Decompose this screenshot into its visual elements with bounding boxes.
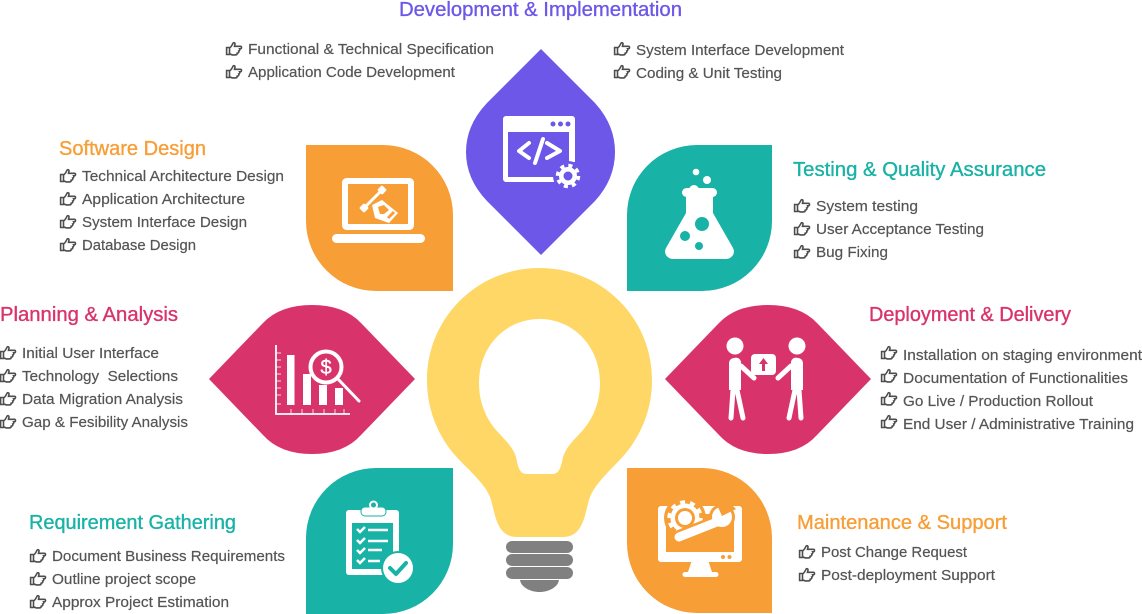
panel: requirement gathering: [29, 468, 453, 614]
shape: purple drop: [466, 49, 615, 255]
list: requirement: Document Business Requirements: [52, 548, 285, 565]
panel: planning and analysis: [0, 304, 415, 454]
panel: testing and quality assurance: [627, 145, 1046, 291]
list: development left: Functional & Technical Specification: [248, 41, 494, 58]
list: maintenance: Post-deployment Support: [821, 567, 996, 584]
list: deployment: Documentation of Functionalities: [903, 370, 1128, 387]
panel: development and implementation: [227, 0, 845, 255]
icon: bar chart with magnifier: [276, 345, 359, 414]
list: deployment: Go Live / Production Rollout: [903, 393, 1094, 410]
icon: code window with gear: [503, 116, 583, 191]
heading: software design: Software Design: [59, 138, 206, 160]
list: development right: System Interface Development: [636, 42, 845, 59]
list: software design: Technical Architecture Design: [82, 168, 284, 185]
list: software design: Application Architecture: [82, 191, 245, 208]
list: testing: Bug Fixing: [816, 244, 888, 261]
list: maintenance: Post Change Request: [821, 544, 968, 561]
list: software design: System Interface Design: [82, 214, 247, 231]
heading: requirement: Requirement Gathering: [29, 512, 236, 534]
icon: clipboard checklist: [346, 502, 415, 585]
list: deployment: [882, 347, 1142, 433]
list: deployment: End User / Administrative Training: [903, 416, 1134, 433]
shape: orange leaf: [627, 468, 772, 613]
list: requirement: Outline project scope: [52, 571, 196, 588]
panel: software design: [59, 138, 453, 291]
list: deployment: Installation on staging environment: [903, 347, 1142, 364]
list: planning: Initial User Interface: [22, 345, 159, 362]
list: software design: [61, 168, 284, 254]
heading: planning: Planning & Analysis: [0, 304, 178, 326]
light bulb: [427, 268, 652, 592]
icon: monitor with gear and wrench: [658, 497, 742, 577]
list: planning: Data Migration Analysis: [22, 391, 183, 408]
icon: laptop with pen tool: [332, 181, 425, 243]
list: development right: Coding & Unit Testing: [636, 65, 782, 82]
panel: deployment and delivery: [665, 304, 1142, 454]
shape: pink diamond left: [209, 305, 415, 454]
list: testing: System testing: [816, 198, 918, 215]
list: planning: Gap & Fesibility Analysis: [22, 414, 188, 431]
icon: two people exchanging a box: [726, 338, 806, 418]
list: requirement: Approx Project Estimation: [52, 594, 229, 611]
list: planning: [1, 345, 188, 431]
list: requirement: [31, 548, 285, 611]
bulb base: [506, 541, 573, 592]
heading: deployment: Deployment & Delivery: [869, 304, 1071, 326]
list: testing: User Acceptance Testing: [816, 221, 984, 238]
list: testing: [795, 198, 984, 261]
shape: teal leaf: [627, 145, 772, 291]
icon: flask: [665, 169, 734, 259]
shape: teal leaf: [306, 468, 453, 614]
icon: bar chart with magnifier: $: [320, 357, 332, 379]
list: development right: [615, 42, 845, 82]
heading: maintenance: Maintenance & Support: [797, 512, 1007, 534]
panel: maintenance and support: [627, 468, 1007, 613]
list: software design: Database Design: [82, 237, 196, 254]
heading: testing: Testing & Quality Assurance: [793, 159, 1046, 181]
list: development left: [227, 41, 494, 81]
list: development left: Application Code Development: [248, 64, 456, 81]
shape: orange leaf: [306, 145, 453, 291]
list: maintenance: [800, 544, 996, 584]
shape: pink diamond right: [665, 305, 871, 454]
list: planning: Technology Selections: [22, 368, 178, 385]
